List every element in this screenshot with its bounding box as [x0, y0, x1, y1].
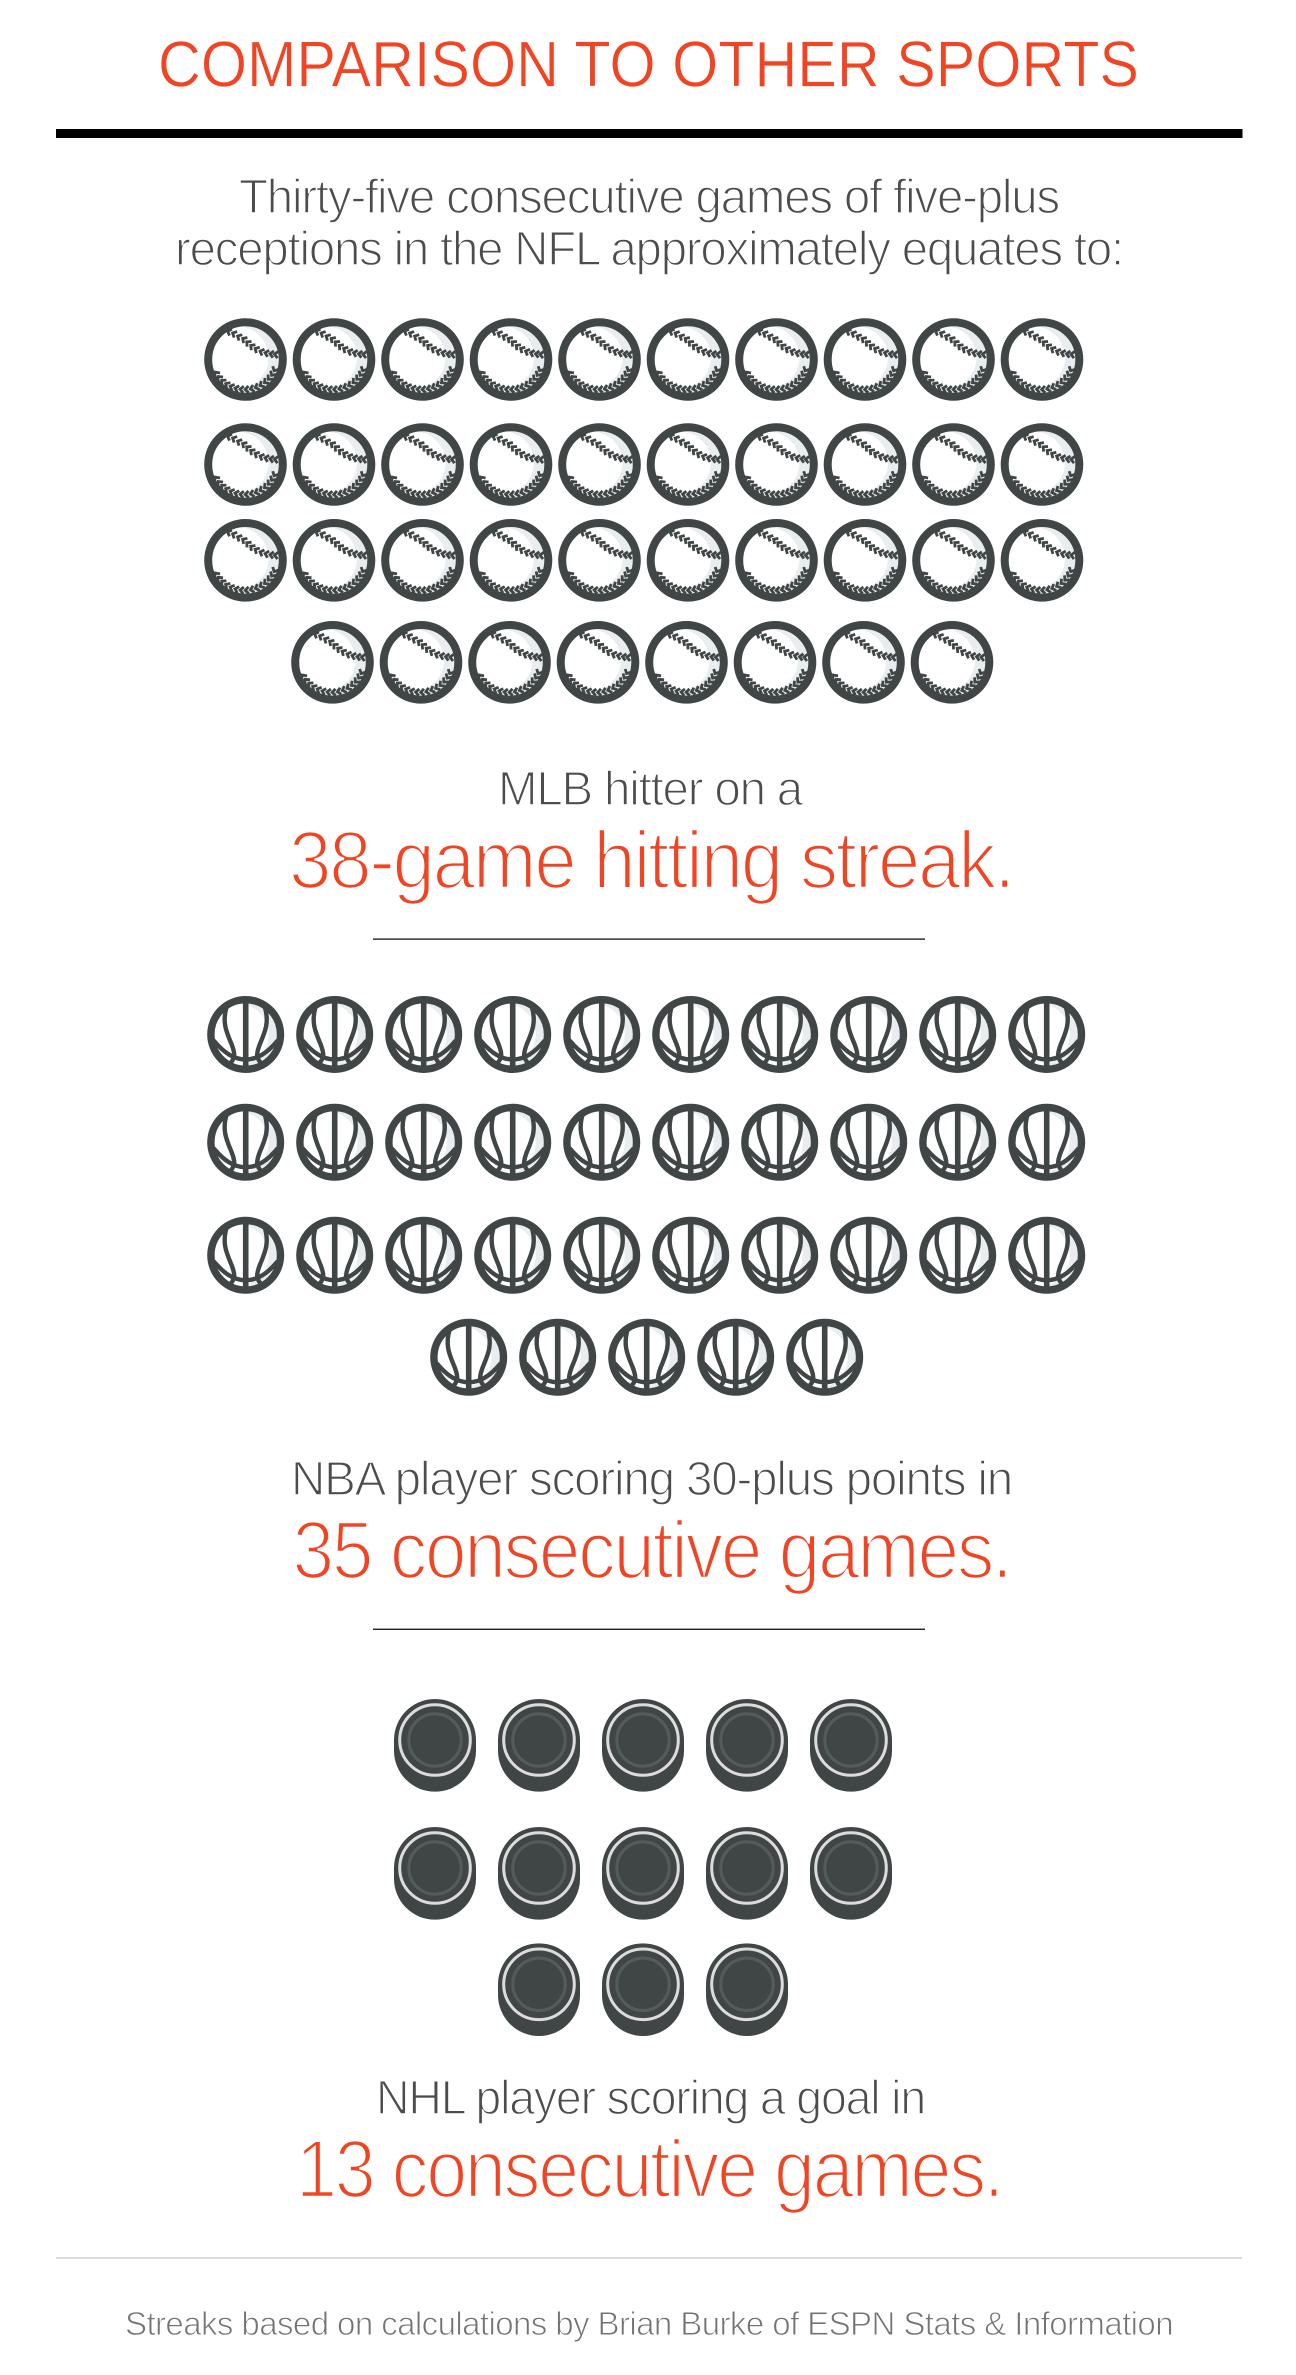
intro text: Thirty-five consecutive games of five-plus	[239, 171, 1059, 224]
baseball row 4	[294, 625, 989, 700]
NBA label: NBA player scoring 30-plus points in	[291, 1453, 1012, 1506]
icon grid: 13 hockey pucks	[394, 1699, 892, 2036]
basketball row 3	[207, 1220, 1081, 1290]
panel: basketball comparison	[207, 1000, 1081, 1596]
NHL label: NHL player scoring a goal in	[376, 2072, 925, 2125]
icon grid: 38 baseballs	[206, 322, 1079, 700]
panel: baseball comparison	[206, 322, 1079, 906]
basketball row 1	[207, 1000, 1081, 1069]
NBA streak headline: 35 consecutive games.	[292, 1505, 1010, 1596]
title: COMPARISON TO OTHER SPORTS	[158, 28, 1139, 100]
intro text	[175, 171, 1123, 276]
puck row 3	[498, 1943, 788, 2036]
footer source note: Streaks based on calculations by Brian Burke of ESPN Stats & Information	[125, 2305, 1173, 2342]
intro text: receptions in the NFL approximately equates to:	[175, 223, 1123, 276]
baseball row 2	[206, 427, 1079, 502]
NHL streak headline: 13 consecutive games.	[296, 2124, 1002, 2215]
MLB streak headline: 38-game hitting streak.	[289, 815, 1013, 906]
panel: hockey comparison	[296, 1699, 1002, 2215]
puck row 2	[394, 1827, 892, 1920]
MLB label: MLB hitter on a	[498, 763, 803, 816]
basketball row 2	[207, 1108, 1081, 1177]
baseball row 3	[206, 523, 1079, 598]
icon grid: 35 basketballs	[207, 1000, 1081, 1392]
puck row 1	[394, 1699, 892, 1792]
basketball row 4	[430, 1322, 860, 1392]
baseball row 1	[206, 322, 1079, 397]
